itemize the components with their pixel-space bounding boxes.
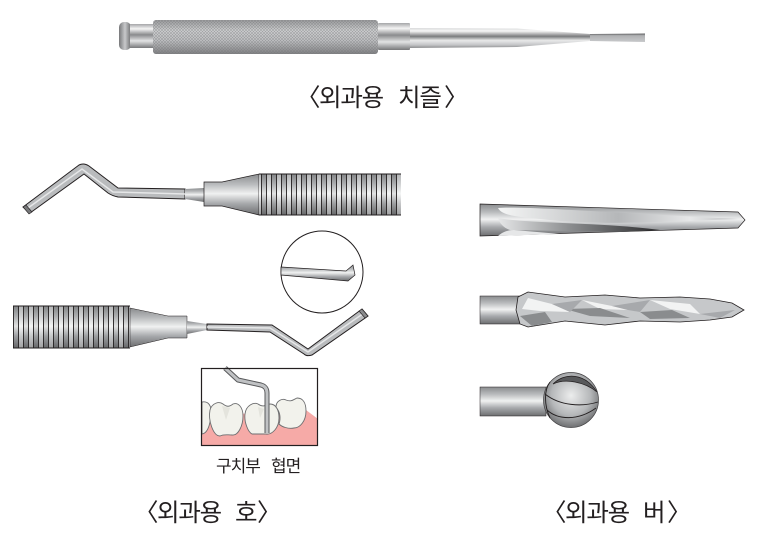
heading: surgical hoe: 외과용 (157, 499, 222, 527)
heading: surgical bur: 〉 (667, 500, 690, 527)
heading: surgical bur: 외과용 (565, 499, 630, 527)
icon: tapered diamond bur (480, 292, 744, 327)
heading: surgical bur: 버 (643, 499, 664, 527)
icon: surgical chisel (119, 20, 645, 54)
icon: surgical hoe bottom (13, 306, 368, 356)
heading: surgical chisel: 치즐 (398, 84, 441, 112)
heading: surgical hoe: 호 (235, 500, 257, 527)
heading: surgical bur: 〈 (542, 500, 566, 527)
heading: surgical hoe: 〉 (257, 500, 280, 527)
icon: round bur (480, 372, 598, 428)
heading: surgical chisel: 〉 (444, 85, 467, 112)
caption: buccal surface: 구치부 (216, 457, 260, 476)
icon: surgical hoe top (23, 164, 401, 215)
panel: buccal surface inset (202, 368, 318, 446)
icon: teeth (202, 398, 306, 436)
heading: surgical chisel: 외과용 (319, 84, 384, 112)
caption: buccal surface: 협면 (271, 457, 300, 476)
icon: magnified hoe tip (281, 231, 363, 313)
icon: hoe in inset (225, 368, 267, 433)
heading: surgical chisel: 〈 (296, 85, 320, 112)
heading: surgical hoe: 〈 (134, 500, 158, 527)
icon: twist drill bur (480, 204, 745, 236)
